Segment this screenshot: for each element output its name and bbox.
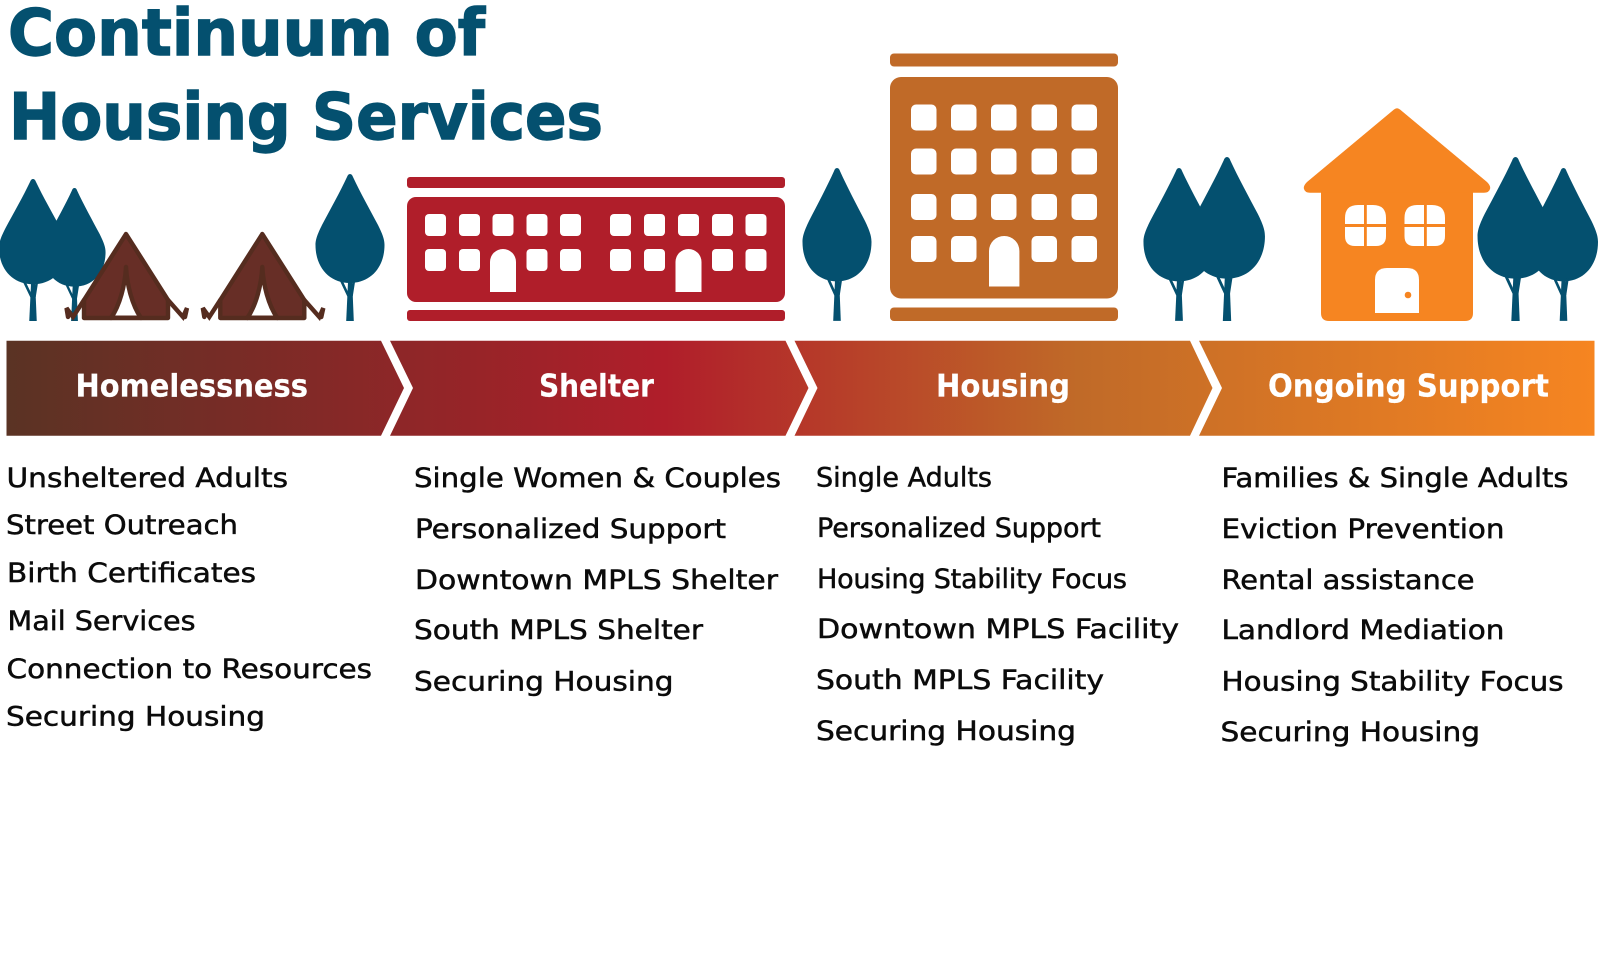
icon: tree between shelter and apartment <box>802 168 872 321</box>
heading: Shelter: Shelter <box>539 368 655 404</box>
text block: Homelessness services: Securing Housing <box>6 702 265 732</box>
text block: Homelessness services <box>6 463 372 732</box>
icon: tents <box>66 234 323 318</box>
heading: Housing: Housing <box>936 368 1070 404</box>
icon: shelter building <box>407 177 785 321</box>
text block: Ongoing Support services: Housing Stability Focus <box>1222 666 1564 698</box>
text block: Shelter services: Securing Housing <box>414 666 674 698</box>
text block: Housing services: Personalized Support <box>817 513 1101 544</box>
text block: Shelter services: Downtown MPLS Shelter <box>415 565 779 596</box>
text block: Ongoing Support services <box>1220 463 1568 748</box>
text block: Homelessness services: Connection to Resources <box>6 654 372 685</box>
text block: Shelter services: Personalized Support <box>415 514 726 545</box>
text block: Housing services: Single Adults <box>816 462 992 494</box>
text block: Ongoing Support services: Eviction Prevention <box>1222 514 1504 545</box>
text block: Ongoing Support services: Rental assistance <box>1222 565 1474 596</box>
heading: Homelessness: Homelessness <box>76 368 308 404</box>
icon: two trees left of tents <box>0 179 106 321</box>
text block: Ongoing Support services: Families & Single Adults <box>1222 463 1568 494</box>
text block: Housing services: South MPLS Facility <box>816 665 1104 696</box>
text block: Shelter services: South MPLS Shelter <box>414 615 704 646</box>
text block: Ongoing Support services: Landlord Mediation <box>1222 615 1504 646</box>
text block: Shelter services: Single Women & Couples <box>414 463 781 494</box>
icon: house <box>1304 108 1490 321</box>
arrow: stage chevrons <box>6 341 1594 436</box>
icon: two trees between apartment and house <box>1143 157 1265 321</box>
heading: Ongoing Support: Ongoing Support <box>1268 368 1549 404</box>
text block: Homelessness services: Unsheltered Adults <box>6 463 288 494</box>
text block: Housing services: Securing Housing <box>816 716 1076 747</box>
text block: Homelessness services: Mail Services <box>8 606 196 637</box>
text block: Housing services: Downtown MPLS Facility <box>817 614 1179 645</box>
text block: Housing services <box>816 462 1179 747</box>
title: Housing Services <box>9 81 603 155</box>
text block: Homelessness services: Street Outreach <box>6 510 238 541</box>
text block: Housing services: Housing Stability Focus <box>817 564 1127 595</box>
icon: tree right of tents <box>316 174 384 321</box>
icon: apartment building <box>890 54 1118 321</box>
icon: two trees right of house <box>1478 157 1598 321</box>
text block: Homelessness services: Birth Certificates <box>7 558 256 589</box>
title <box>8 0 603 155</box>
text block: Ongoing Support services: Securing Housing <box>1220 717 1480 748</box>
text block: Shelter services <box>414 463 781 698</box>
